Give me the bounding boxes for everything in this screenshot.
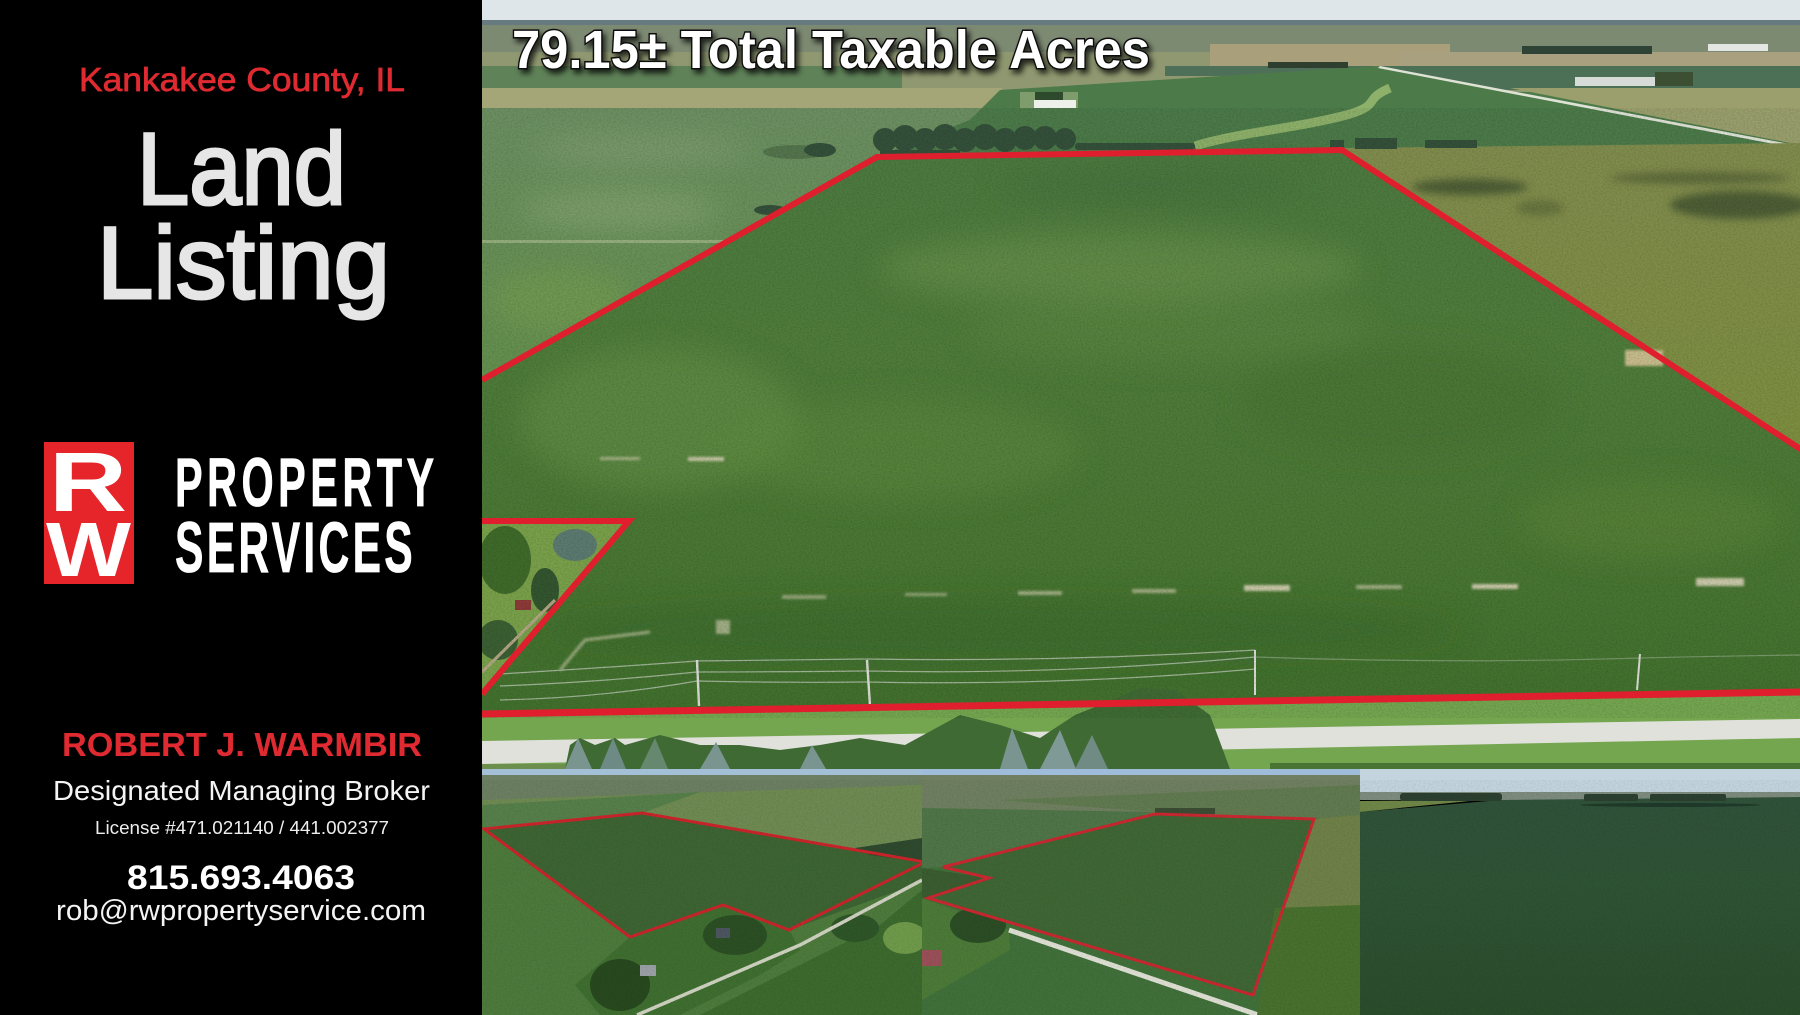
road — [637, 880, 922, 1015]
RW Property Services logo — [44, 435, 439, 593]
crop colour variation — [520, 167, 1780, 660]
heading: Land: Land — [137, 112, 346, 226]
far strip — [1360, 792, 1800, 800]
logo letter R: R — [49, 435, 127, 529]
homestead at left — [922, 868, 989, 898]
far left field — [922, 808, 1155, 868]
sky — [482, 769, 922, 775]
farmstead — [1020, 92, 1078, 108]
field divider line — [482, 240, 728, 243]
tree line — [1155, 808, 1215, 814]
tree line at top edge of property — [754, 124, 1477, 215]
base field — [482, 769, 922, 1015]
title: total acreage: 79.15± Total Taxable Acres — [512, 20, 1150, 80]
green field behind property — [970, 66, 1502, 120]
location heading: Kankakee County, IL — [79, 61, 405, 98]
inset photo: aerial view from the south — [482, 769, 927, 1015]
neighbouring green pasture — [482, 792, 700, 828]
neighbouring homestead wedge — [478, 520, 628, 695]
cloud shadows — [1412, 172, 1800, 219]
base field — [922, 769, 1360, 1015]
red boundary — [484, 813, 925, 937]
logo word PROPERTY: PROPERTY — [175, 444, 439, 522]
inset photo: ground view of the soybean field — [1360, 769, 1800, 1015]
logo word SERVICES: SERVICES — [175, 509, 416, 588]
shadow under trees — [1580, 803, 1760, 807]
distant horizon fields — [482, 20, 1800, 92]
homestead trees — [575, 905, 800, 1015]
sky — [482, 0, 1800, 21]
tree lines on horizon — [1400, 793, 1726, 801]
upper left field — [482, 108, 1000, 380]
heading: Listing: Listing — [97, 206, 390, 320]
property field — [928, 814, 1314, 995]
tan strip field — [482, 88, 1002, 108]
email address: rob@rwpropertyservice.com — [56, 895, 426, 927]
power lines and poles — [500, 650, 1800, 706]
main property field — [482, 148, 1800, 716]
road — [1009, 930, 1267, 1015]
phone number: 815.693.4063 — [127, 859, 355, 897]
broker title: Designated Managing Broker — [53, 775, 430, 806]
property field — [484, 813, 922, 937]
olive neighbouring field — [1341, 143, 1800, 448]
license numbers: License #471.021140 / 441.002377 — [95, 818, 389, 838]
base ground colour behind the far fields — [894, 92, 1792, 153]
mid field — [1000, 785, 1360, 820]
background panel: left black column — [0, 0, 482, 1015]
light blotches in upper left field — [512, 136, 722, 320]
grass waterway — [1195, 88, 1390, 146]
roadside grass — [482, 692, 1800, 769]
tree block — [1257, 905, 1360, 1015]
distant fields — [922, 775, 1360, 815]
corner trees — [855, 838, 922, 862]
soybean field — [1360, 797, 1800, 1015]
red property boundary — [482, 150, 1800, 714]
inset photo: aerial view from the east — [922, 769, 1360, 1015]
distant fields — [482, 775, 922, 805]
distant white road — [1378, 66, 1800, 149]
houses — [640, 965, 656, 976]
logo letter W: W — [46, 507, 131, 593]
mid fields — [482, 785, 922, 862]
broker name: ROBERT J. WARMBIR — [62, 726, 422, 763]
striped crop field at right — [1280, 815, 1360, 910]
sidebar content — [44, 61, 439, 927]
lower right field beyond road — [700, 890, 922, 1015]
crop texture on insets — [482, 780, 1800, 1015]
sky — [922, 769, 1360, 775]
left corner field — [1360, 800, 1480, 812]
gravel road — [482, 719, 1800, 764]
white marker patches in field — [560, 350, 1744, 670]
red boundary — [928, 814, 1314, 995]
crop texture overlay — [482, 108, 1800, 718]
main aerial photo of the field — [478, 0, 1800, 769]
right tan field — [1510, 88, 1800, 145]
logo red block — [44, 442, 134, 584]
sky — [1360, 769, 1800, 794]
dark field below road — [1270, 763, 1800, 769]
roadside trees — [565, 688, 1230, 769]
